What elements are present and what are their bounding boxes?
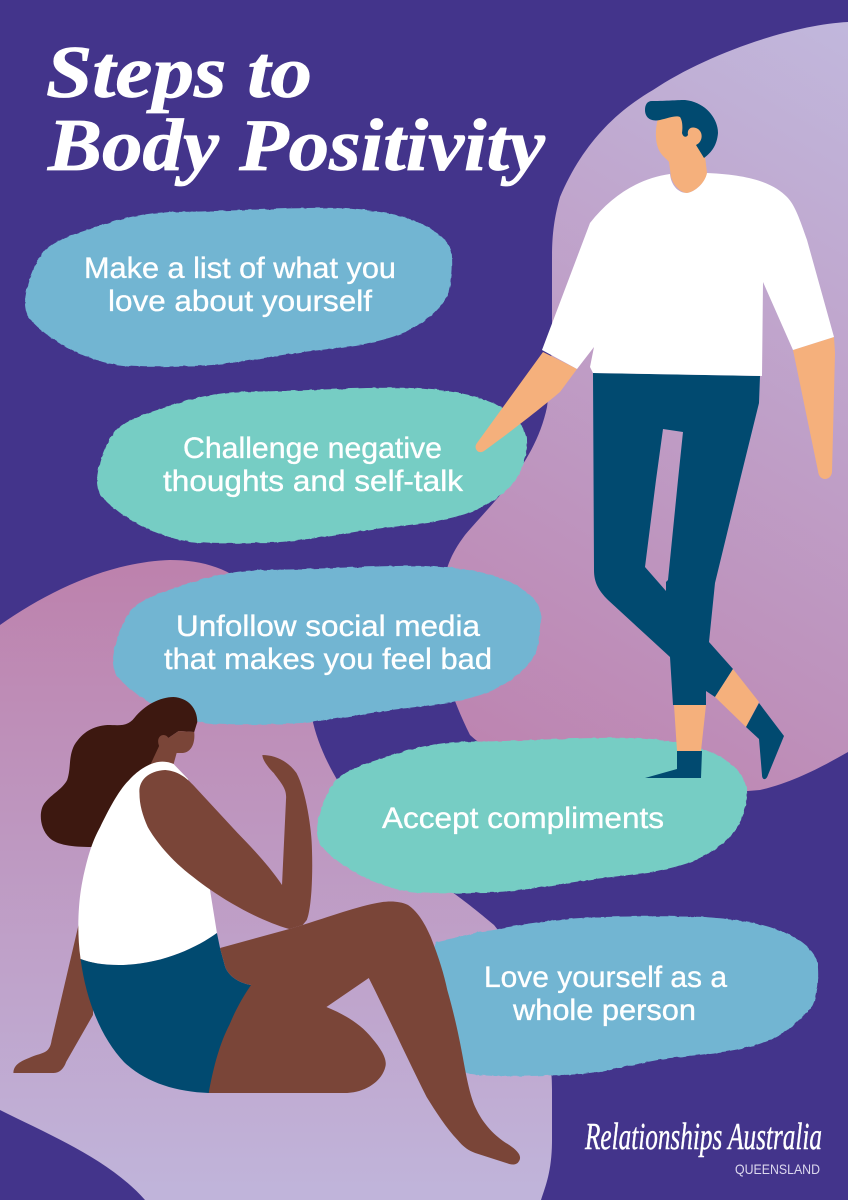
- woman head and neck: [150, 731, 194, 768]
- woman hair: [41, 697, 197, 847]
- man right forearm: [793, 337, 835, 479]
- step 3: unfollow social media: Unfollow social media: [176, 610, 480, 643]
- step 5: love yourself: Love yourself as a: [484, 961, 727, 994]
- logo: Relationships Australia Queensland: QUEENSLAND: [735, 1161, 820, 1177]
- man shoes: [645, 703, 784, 779]
- step 2: challenge negative thoughts: [97, 388, 527, 543]
- man head and neck: [656, 108, 707, 193]
- woman back arm: [13, 925, 95, 1073]
- step 2: challenge negative thoughts: Challenge negative: [183, 432, 442, 465]
- step 1: make a list: love about yourself: [108, 285, 373, 318]
- step 1: make a list: [25, 208, 452, 367]
- logo: Relationships Australia Queensland: [584, 1116, 822, 1177]
- title: Steps to: [46, 32, 312, 114]
- background blob: upper right: [440, 22, 848, 793]
- step 5: love yourself: whole person: [512, 994, 696, 1027]
- step 4: accept compliments: Accept compliments: [382, 802, 664, 835]
- step 3: unfollow social media: [113, 566, 541, 725]
- man ankles: [674, 669, 759, 751]
- step 5: love yourself: [429, 916, 818, 1076]
- man left forearm: [476, 352, 577, 452]
- illustration: seated woman: [13, 697, 520, 1165]
- woman legs: [209, 902, 520, 1165]
- step 2: challenge negative thoughts: thoughts and self-talk: [163, 465, 464, 498]
- step 1: make a list: Make a list of what you: [84, 252, 396, 285]
- title: [46, 32, 546, 187]
- woman top: [78, 762, 217, 965]
- woman shorts: [81, 933, 263, 1093]
- man hair: [645, 100, 718, 158]
- step 3: unfollow social media: that makes you feel bad: [164, 643, 492, 676]
- background blob: lower left: [0, 560, 552, 1200]
- man shirt: [542, 173, 834, 376]
- title: Body Positivity: [47, 105, 546, 187]
- step 4: accept compliments: [317, 738, 747, 893]
- illustration: standing man: [476, 100, 835, 779]
- woman front arm: [139, 755, 312, 929]
- man trousers: [593, 373, 760, 705]
